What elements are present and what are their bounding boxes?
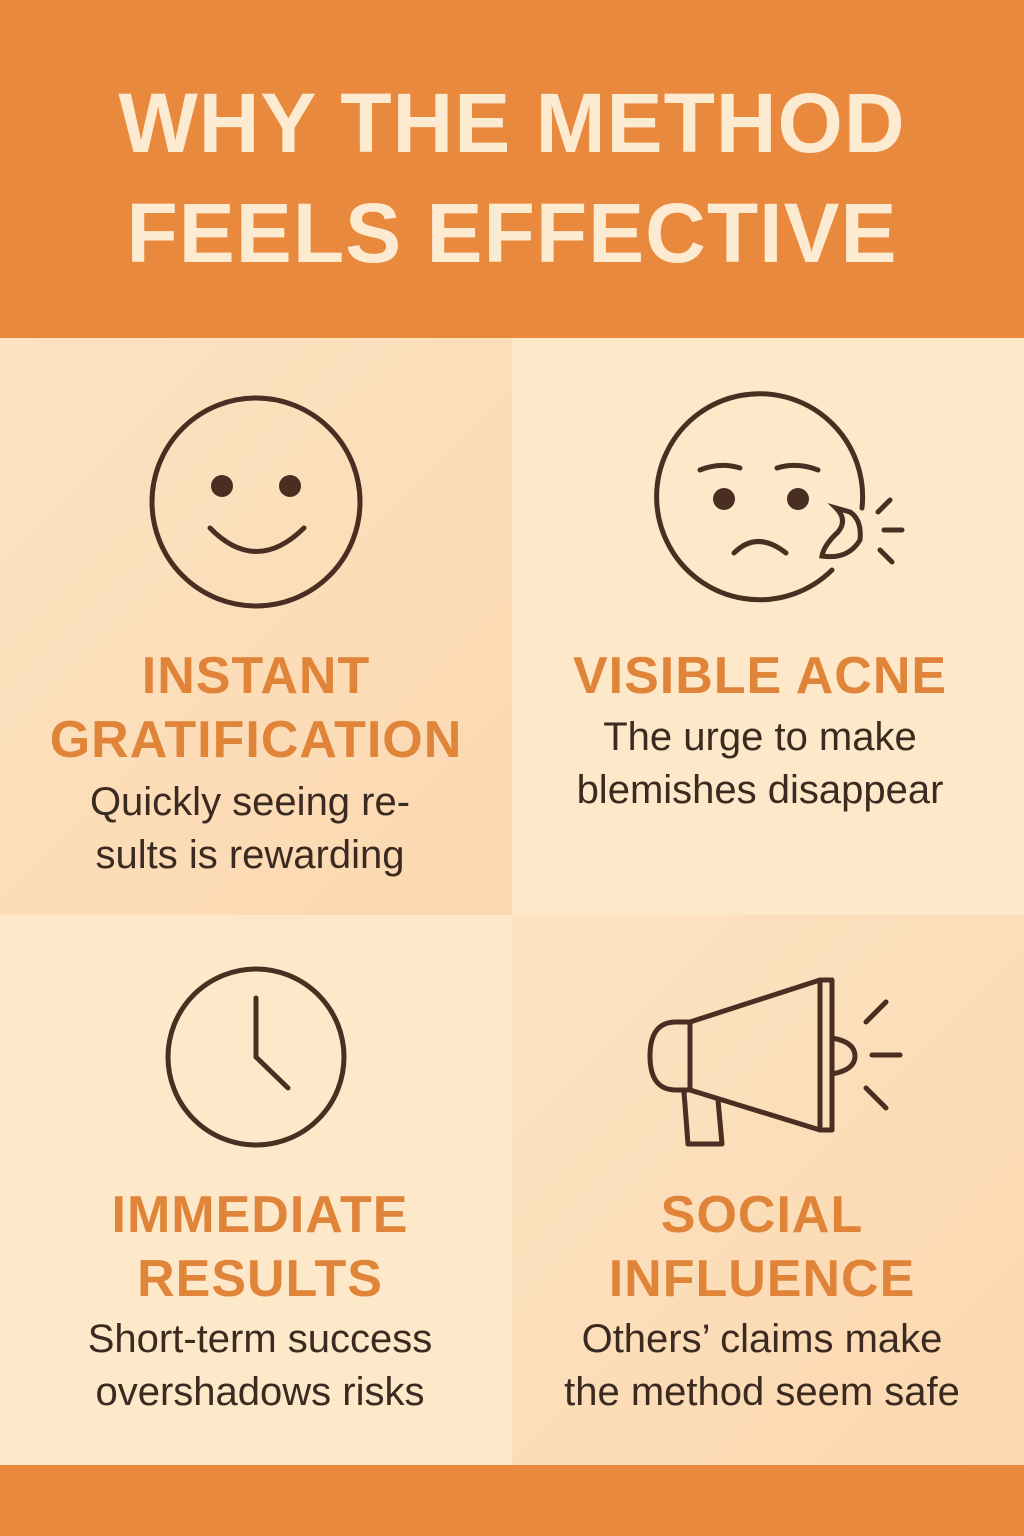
title: WHY THE METHOD [118, 76, 906, 170]
header [0, 0, 1024, 338]
heading: INSTANT [142, 647, 370, 705]
heading [112, 1186, 408, 1308]
body text [564, 1317, 960, 1414]
panel: social influence [512, 915, 1024, 1465]
body text: Short-term success [88, 1317, 432, 1361]
heading: VISIBLE ACNE [573, 647, 947, 705]
icon: smiley [150, 396, 362, 608]
heading: GRATIFICATION [50, 711, 462, 769]
panel: visible acne [512, 338, 1024, 915]
heading: SOCIAL [661, 1186, 863, 1244]
title [118, 76, 906, 280]
body text [577, 715, 943, 812]
body text: overshadows risks [95, 1370, 424, 1414]
heading: RESULTS [137, 1250, 383, 1308]
body text: the method seem safe [564, 1370, 960, 1414]
body text: blemishes disappear [577, 768, 943, 812]
body text: Others’ claims make [582, 1317, 942, 1361]
body text: Quickly seeing re- [90, 780, 410, 824]
panel: immediate results [0, 915, 512, 1465]
heading [609, 1186, 915, 1308]
heading: INFLUENCE [609, 1250, 915, 1308]
body text [88, 1317, 432, 1414]
heading: IMMEDIATE [112, 1186, 408, 1244]
icon: megaphone [648, 978, 902, 1146]
footer bar [0, 1465, 1024, 1536]
heading [50, 647, 462, 769]
body text: The urge to make [603, 715, 917, 759]
icon: sad face [654, 391, 904, 602]
title: FEELS EFFECTIVE [126, 186, 898, 280]
panel: instant gratification [0, 338, 512, 915]
body text [90, 780, 410, 877]
icon: clock [166, 966, 346, 1148]
body text: sults is rewarding [95, 833, 404, 877]
